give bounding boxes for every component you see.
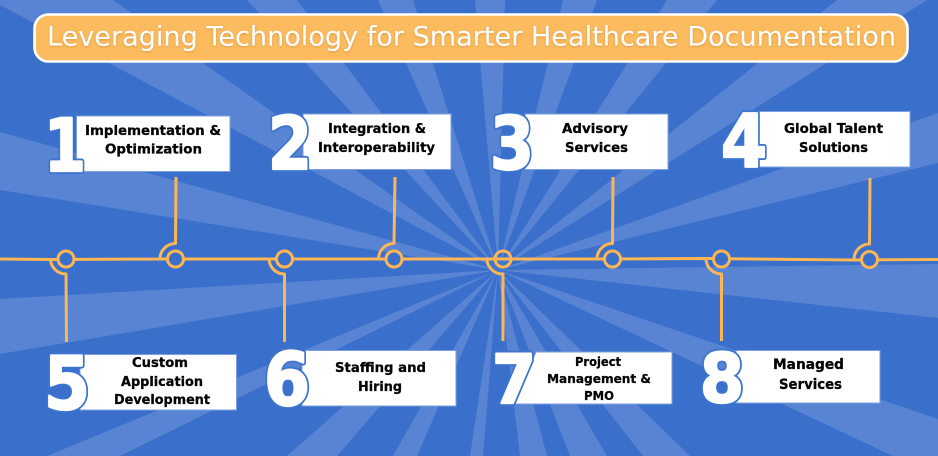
item 8: Managed Services: 8 (700, 340, 744, 419)
title banner (34, 14, 908, 62)
item 5: Custom Application Development: Application (121, 374, 203, 390)
item 8: Managed Services (700, 340, 880, 419)
item 3: Advisory Services: Services (565, 140, 628, 156)
timeline nodes (58, 251, 878, 268)
item 7: Project Management & PMO (492, 341, 672, 420)
item 6: Staffing and Hiring: 6 (264, 338, 310, 423)
item 8: Managed Services: Managed (773, 357, 844, 373)
item 6: Staffing and Hiring: 6 (264, 338, 310, 423)
item 4: Global Talent Solutions: Solutions (799, 140, 868, 156)
item 3: Advisory Services: 3 (490, 102, 534, 187)
item 7: Project Management & PMO: Project (575, 354, 621, 369)
item 4: Global Talent Solutions (721, 100, 910, 184)
item 7: Project Management & PMO: 7 (492, 341, 536, 420)
item 1: Implementation & Optimization: Implementation & (85, 123, 221, 139)
item 3: Advisory Services: Advisory (562, 121, 628, 137)
item 3: Advisory Services: 3 (490, 102, 534, 187)
timeline line and connectors (0, 259, 66, 342)
item 5: Custom Application Development: Custom (132, 355, 188, 371)
item 2: Integration & Interoperability (268, 102, 451, 187)
item 1: Implementation & Optimization: 1 (44, 104, 86, 189)
item 1: Implementation & Optimization: Optimization (105, 142, 202, 158)
item 5: Custom Application Development (44, 342, 236, 427)
item 6: Staffing and Hiring: Staffing and (335, 360, 426, 376)
item 7: Project Management & PMO: Management & (547, 371, 651, 386)
item 1: Implementation & Optimization: 1 (44, 104, 86, 189)
item 1: Implementation & Optimization (44, 104, 230, 189)
item 3: Advisory Services (490, 102, 668, 187)
item 6: Staffing and Hiring (264, 338, 456, 423)
item 8: Managed Services: 8 (700, 340, 744, 419)
item 8: Managed Services: Services (779, 377, 842, 393)
item 2: Integration & Interoperability: 2 (268, 102, 312, 187)
item 2: Integration & Interoperability: 2 (268, 102, 312, 187)
timeline (0, 177, 938, 342)
item 7: Project Management & PMO: PMO (584, 388, 614, 403)
item 4: Global Talent Solutions: 4 (721, 100, 767, 184)
item 4: Global Talent Solutions: 4 (721, 100, 767, 184)
item 7: Project Management & PMO: 7 (492, 341, 536, 420)
item 5: Custom Application Development: 5 (44, 342, 90, 427)
item 4: Global Talent Solutions: Global Talent (784, 121, 884, 137)
item 2: Integration & Interoperability: Interoperability (318, 140, 435, 156)
item 5: Custom Application Development: 5 (44, 342, 90, 427)
item 5: Custom Application Development: Development (114, 392, 211, 408)
item 6: Staffing and Hiring: Hiring (358, 379, 402, 395)
title text: Leveraging Technology for Smarter Healthcare Documentation (47, 22, 896, 52)
item 2: Integration & Interoperability: Integration & (328, 121, 426, 137)
